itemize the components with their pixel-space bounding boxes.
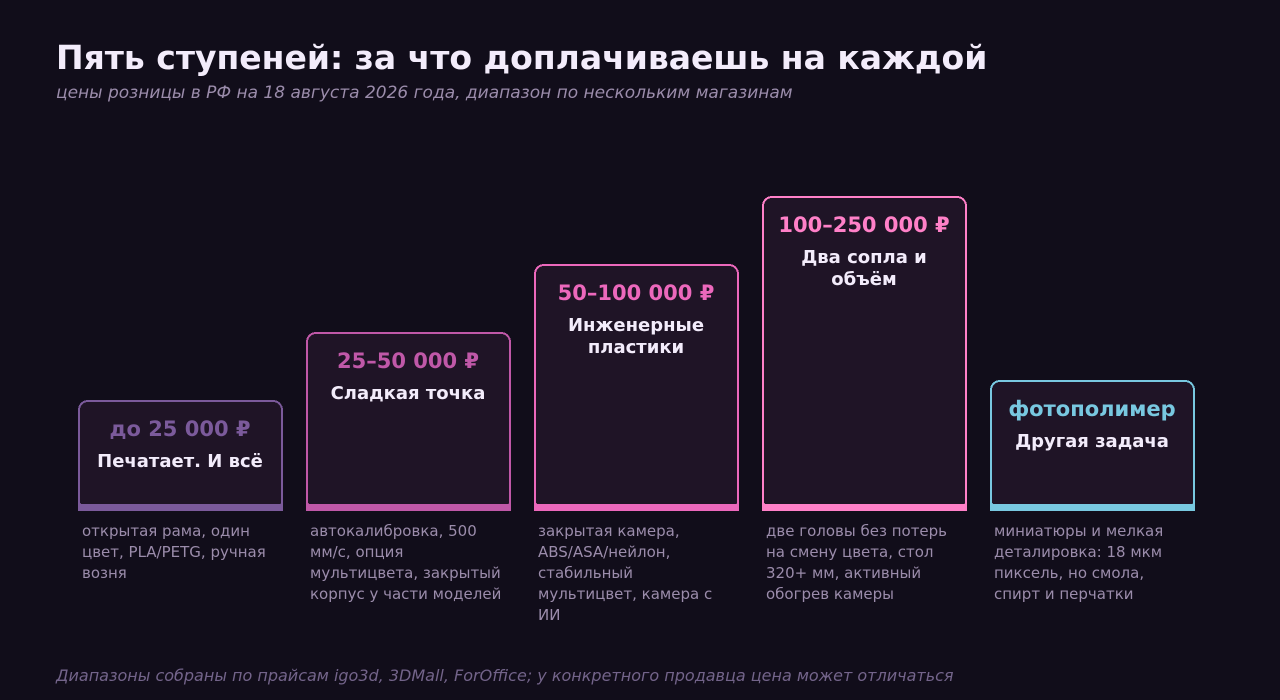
step 1 card	[78, 400, 283, 511]
step 3 card	[534, 264, 739, 511]
step 5 description: деталировка: 18 мкм	[994, 543, 1162, 561]
step 4 description: 320+ мм, активный	[766, 564, 921, 582]
step 3 description	[538, 522, 712, 624]
step 4 description: две головы без потерь	[766, 522, 947, 540]
step 3 description: закрытая камера,	[538, 522, 680, 540]
step 2 description: корпус у части моделей	[310, 585, 501, 603]
step 5 description: пиксель, но смола,	[994, 564, 1144, 582]
title: Пять ступеней: за что доплачиваешь на каждой	[56, 38, 987, 77]
step 3 description: стабильный	[538, 564, 633, 582]
step 2 price: 25–50 000 ₽	[337, 349, 479, 373]
step 5 name: Другая задача	[1015, 431, 1169, 452]
step 1 name: Печатает. И всё	[97, 451, 263, 472]
subtitle: цены розницы в РФ на 18 августа 2026 года, диапазон по нескольким магазинам	[56, 83, 793, 103]
step 1 description: открытая рама, один	[82, 522, 250, 540]
step 4 price: 100–250 000 ₽	[778, 213, 950, 237]
step 3 description: ИИ	[538, 606, 560, 624]
step 1 price: до 25 000 ₽	[110, 417, 250, 441]
step 2 description: мультицвета, закрытый	[310, 564, 501, 582]
step 2 description: мм/с, опция	[310, 543, 403, 561]
step 3 name: Инженерные пластики	[568, 315, 704, 358]
step 1 description	[82, 522, 266, 582]
step 4 card	[762, 196, 967, 511]
footnote: Диапазоны собраны по прайсам igo3d, 3DMall, ForOffice; у конкретного продавца цена может отличаться	[56, 666, 954, 685]
step 1 description: цвет, PLA/PETG, ручная	[82, 543, 266, 561]
step 2 description	[310, 522, 501, 603]
step 5 description: спирт и перчатки	[994, 585, 1134, 603]
step 3 description: мультицвет, камера с	[538, 585, 712, 603]
step 2 card	[306, 332, 511, 511]
step 1 description: возня	[82, 564, 127, 582]
step 5 price: фотополимер	[1008, 397, 1176, 421]
step 4 description: на смену цвета, стол	[766, 543, 934, 561]
step 3 price: 50–100 000 ₽	[558, 281, 714, 305]
step 4 description: обогрев камеры	[766, 585, 894, 603]
step 4 description	[766, 522, 947, 603]
step 5 description: миниатюры и мелкая	[994, 522, 1163, 540]
step 5 description	[994, 522, 1163, 603]
step 4 name: Два сопла и объём	[801, 247, 927, 290]
step 2 name: Сладкая точка	[331, 383, 485, 404]
step 2 description: автокалибровка, 500	[310, 522, 477, 540]
step 3 description: ABS/ASA/нейлон,	[538, 543, 670, 561]
step 5 card	[990, 380, 1195, 511]
